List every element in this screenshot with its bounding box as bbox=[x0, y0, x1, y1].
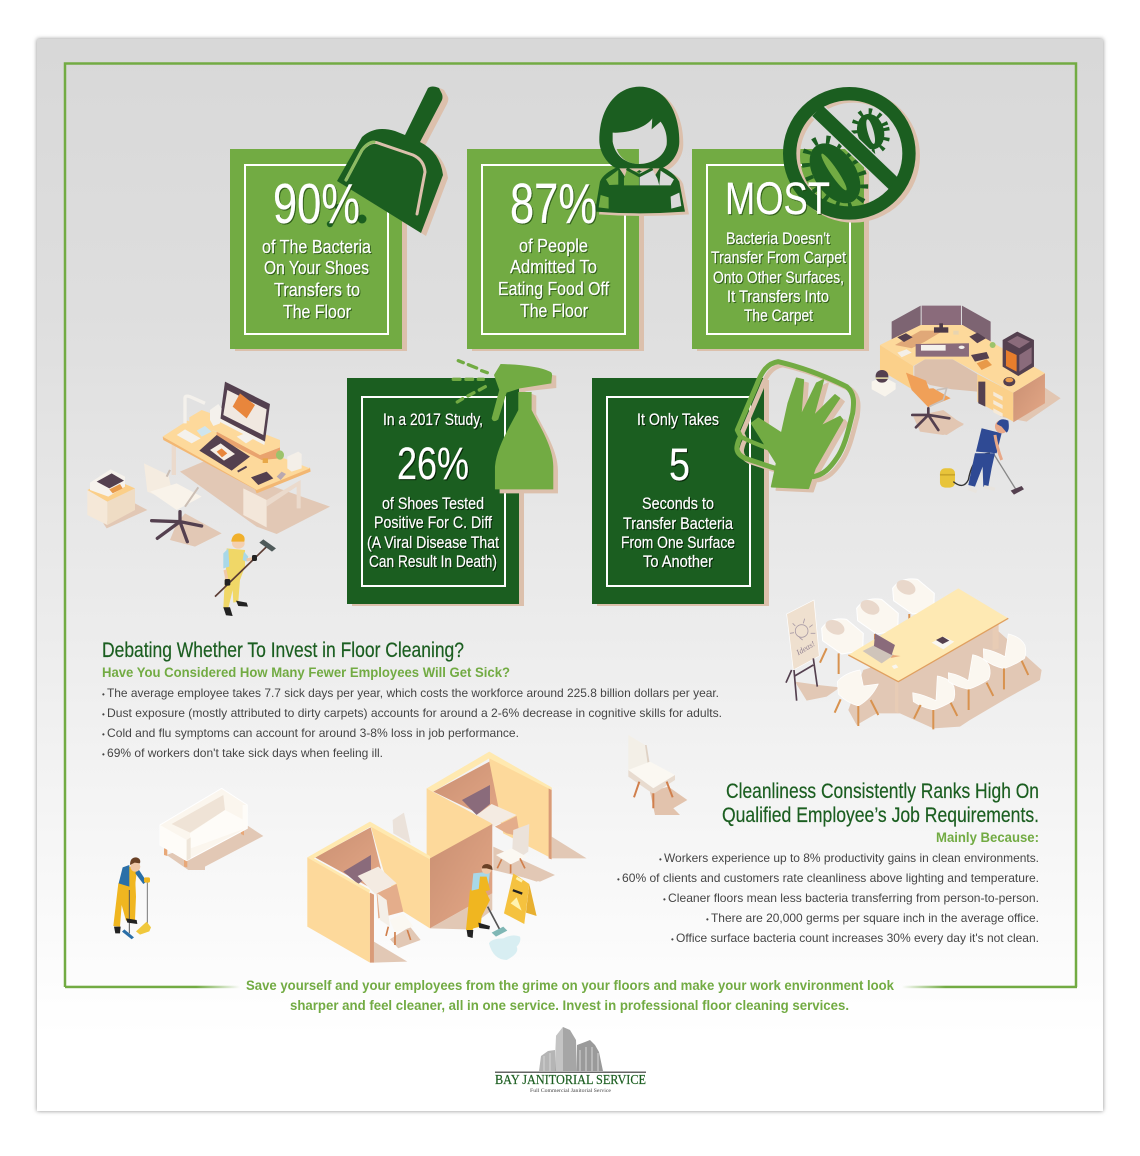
green frame bbox=[65, 64, 1077, 988]
text: bacteria on shoes: The Floor bbox=[283, 301, 351, 322]
stat: 87%: 87% bbox=[510, 172, 597, 236]
closing message: sharper and feel cleaner, all in one service. Invest in professional floor cleaning services. bbox=[290, 997, 849, 1013]
text: bacteria on shoes: of The Bacteria bbox=[262, 236, 372, 257]
text: seconds to transfer: Seconds to bbox=[642, 494, 714, 513]
icon: worker person bbox=[595, 87, 689, 216]
stat: 90%: 90% bbox=[273, 172, 360, 236]
illustration: meeting room table bbox=[786, 577, 1042, 729]
text: cleanliness bullet list: • 60% of clients and customers rate cleanliness above lighting and temperature. bbox=[617, 871, 1039, 885]
panel: most bacteria bbox=[692, 94, 913, 351]
icon: dustpan bbox=[327, 86, 448, 236]
stat: MOST: MOST bbox=[725, 173, 830, 224]
text: eating food off floor: Eating Food Off bbox=[498, 278, 610, 299]
logo: Bay Janitorial Service: BAY JANITORIAL SERVICE bbox=[495, 1072, 646, 1087]
section: cleanliness heading bbox=[722, 780, 1039, 827]
stat: 5: 5 bbox=[669, 439, 690, 490]
illustration: sofa bbox=[160, 788, 263, 870]
illustration: single chair bbox=[628, 735, 687, 815]
icon: no bacteria sign bbox=[790, 94, 913, 218]
text: eating food off floor: The Floor bbox=[520, 300, 588, 321]
section: cleanliness heading: Cleanliness Consistently Ranks High On bbox=[726, 780, 1039, 803]
text: eating food off floor bbox=[498, 235, 610, 321]
panel: 87 percent bbox=[467, 87, 689, 351]
stat: 26%: 26% bbox=[397, 438, 469, 489]
text: sick day bullet list: • 69% of workers don't take sick days when feeling ill. bbox=[102, 746, 383, 760]
text: bacteria into carpet bbox=[711, 230, 846, 325]
text: bacteria into carpet: Bacteria Doesn't bbox=[726, 230, 830, 248]
text: seconds to transfer: To Another bbox=[643, 552, 713, 571]
panel: 5 seconds bbox=[592, 362, 858, 606]
illustration: office cubicles bbox=[307, 752, 587, 963]
illustration: designer desk with window cleaner bbox=[87, 382, 330, 616]
text: cleanliness bullet list: • Office surface bacteria count increases 30% every day it's not clean. bbox=[671, 931, 1039, 945]
text: bacteria into carpet: Onto Other Surfaces, bbox=[713, 269, 844, 287]
text: eating food off floor: Admitted To bbox=[510, 256, 597, 277]
text: sick day bullet list: • Cold and flu symptoms can account for around 3-8% loss in job performance. bbox=[102, 726, 519, 740]
logo: Bay Janitorial Service: Full Commercial Janitorial Service bbox=[530, 1089, 612, 1094]
text: sick day bullet list bbox=[102, 686, 722, 760]
closing message: Save yourself and your employees from the grime on your floors and make your work environment look bbox=[246, 977, 894, 993]
section: mainly because: Mainly Because: bbox=[936, 829, 1039, 845]
text: in a 2017 study: In a 2017 Study, bbox=[383, 410, 483, 429]
text: cleanliness bullet list: • Workers experience up to 8% productivity gains in clean environments. bbox=[659, 851, 1039, 865]
text: shoes tested positive: of Shoes Tested bbox=[382, 494, 484, 513]
text: shoes tested positive: (A Viral Disease That bbox=[367, 533, 499, 552]
text: eating food off floor: of People bbox=[519, 235, 588, 256]
text: bacteria into carpet: The Carpet bbox=[744, 307, 813, 325]
text: sick day bullet list: • Dust exposure (mostly attributed to dirty carpets) accounts for around a 2-6% decrease in cognitive skills for adults. bbox=[102, 706, 722, 720]
panel: 90 percent bbox=[230, 86, 448, 351]
text: sick day bullet list: • The average employee takes 7.7 sick days per year, which costs the workforce around 225.8 billion dollars per year. bbox=[102, 686, 719, 700]
panel: 26 percent study bbox=[347, 361, 558, 606]
text: shoes tested positive: Can Result In Death) bbox=[369, 552, 497, 571]
icon: rubber glove bbox=[737, 362, 858, 492]
section: floor cleaning heading: Debating Whether To Invest in Floor Cleaning? bbox=[102, 639, 464, 662]
text: bacteria on shoes: Transfers to bbox=[274, 279, 360, 300]
text: it only takes: It Only Takes bbox=[637, 410, 719, 429]
text: seconds to transfer: Transfer Bacteria bbox=[623, 514, 733, 533]
illustration: meeting room table: Ideas! bbox=[794, 639, 817, 658]
icon: spray bottle bbox=[453, 361, 558, 493]
text: bacteria on shoes: On Your Shoes bbox=[264, 257, 369, 278]
text: bacteria on shoes bbox=[262, 236, 372, 322]
section: floor cleaning subheading: Have You Considered How Many Fewer Employees Will Get Sick? bbox=[102, 664, 510, 680]
logo: Bay Janitorial Service bbox=[495, 1027, 646, 1094]
text: cleanliness bullet list: • There are 20,000 germs per square inch in the average office. bbox=[706, 911, 1039, 925]
text: bacteria into carpet: It Transfers Into bbox=[727, 288, 829, 306]
illustration: worker with broom and dustpan bbox=[113, 857, 151, 939]
text: shoes tested positive: Positive For C. Diff bbox=[374, 513, 492, 532]
section: cleanliness heading: Qualified Employee’s Job Requirements. bbox=[722, 804, 1039, 827]
text: cleanliness bullet list bbox=[617, 851, 1039, 945]
text: bacteria into carpet: Transfer From Carpet bbox=[711, 249, 846, 267]
text: cleanliness bullet list: • Cleaner floors mean less bacteria transferring from person-to-person. bbox=[663, 891, 1039, 905]
text: seconds to transfer: From One Surface bbox=[621, 533, 735, 552]
text: seconds to transfer bbox=[621, 494, 735, 571]
illustration: corner office desk with vacuum worker bbox=[872, 306, 1061, 495]
closing message bbox=[246, 977, 894, 1013]
text: shoes tested positive bbox=[367, 494, 499, 571]
